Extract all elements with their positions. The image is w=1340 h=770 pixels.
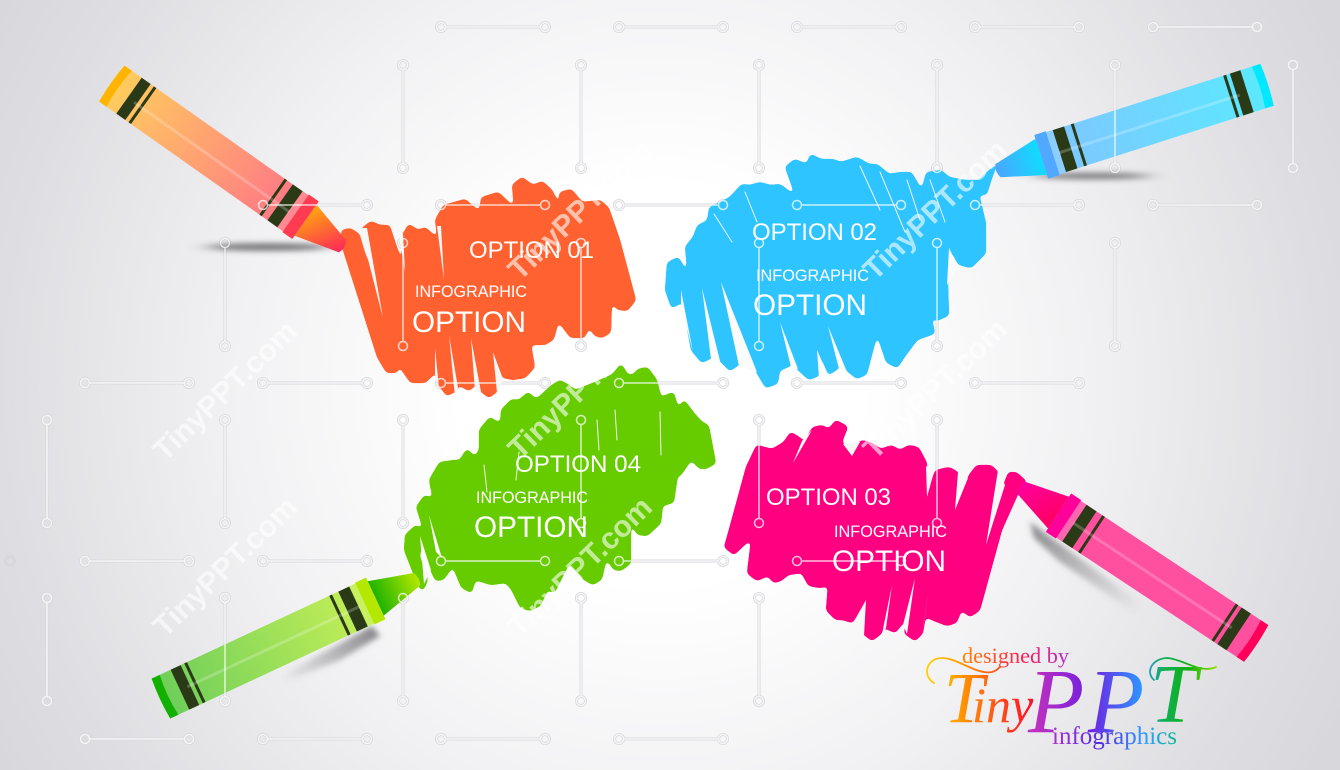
crayon: orange: [98, 64, 357, 266]
option 02 text: INFOGRAPHIC: [756, 267, 869, 285]
watermarks: TinyPPT.com: [502, 313, 659, 466]
logo: designed by TinyPPT infographics: T: [1150, 648, 1202, 741]
option 04 text: [474, 451, 641, 544]
option 04 text: INFOGRAPHIC: [476, 489, 588, 507]
scribble: pink: [725, 421, 1026, 640]
watermarks: TinyPPT.com: [147, 315, 304, 468]
option 03 text: OPTION 03: [766, 484, 891, 511]
watermarks: TinyPPT.com: [857, 313, 1014, 466]
scribble: green: [405, 365, 715, 610]
option 01 text: [412, 237, 594, 339]
crayon: blue: [989, 63, 1275, 193]
option 01 text: INFOGRAPHIC: [415, 283, 527, 301]
watermarks: TinyPPT.com: [857, 134, 1014, 287]
logo: designed by TinyPPT infographics: P: [1087, 650, 1144, 752]
logo: designed by TinyPPT infographics: [927, 643, 1216, 752]
watermarks: TinyPPT.com: [502, 134, 659, 287]
watermarks: [147, 134, 1014, 644]
option 01 text: OPTION: [412, 306, 526, 339]
option 03 text: OPTION: [832, 545, 946, 578]
option 02 text: OPTION: [753, 289, 867, 322]
scribble: blue: [666, 155, 996, 387]
option 03 text: [766, 484, 947, 578]
option 02 text: [752, 219, 877, 322]
crayon: pink: [1006, 467, 1270, 663]
option 01 text: OPTION 01: [469, 237, 594, 264]
scribble: orange: [342, 178, 635, 397]
watermarks: TinyPPT.com: [147, 491, 304, 644]
crayon shadows: [206, 172, 1150, 684]
option 04 text: OPTION 04: [515, 451, 641, 478]
option 02 text: OPTION 02: [752, 219, 877, 246]
logo: designed by TinyPPT infographics: infographics: [1052, 723, 1177, 750]
logo: designed by TinyPPT infographics: designed by: [962, 643, 1069, 668]
option 03 text: INFOGRAPHIC: [834, 523, 947, 541]
option 04 text: OPTION: [474, 511, 588, 544]
watermarks: TinyPPT.com: [502, 491, 659, 644]
logo: designed by TinyPPT infographics: P: [1027, 650, 1084, 752]
logo: designed by TinyPPT infographics: Tiny: [944, 658, 1034, 738]
crayon: green: [150, 558, 428, 720]
